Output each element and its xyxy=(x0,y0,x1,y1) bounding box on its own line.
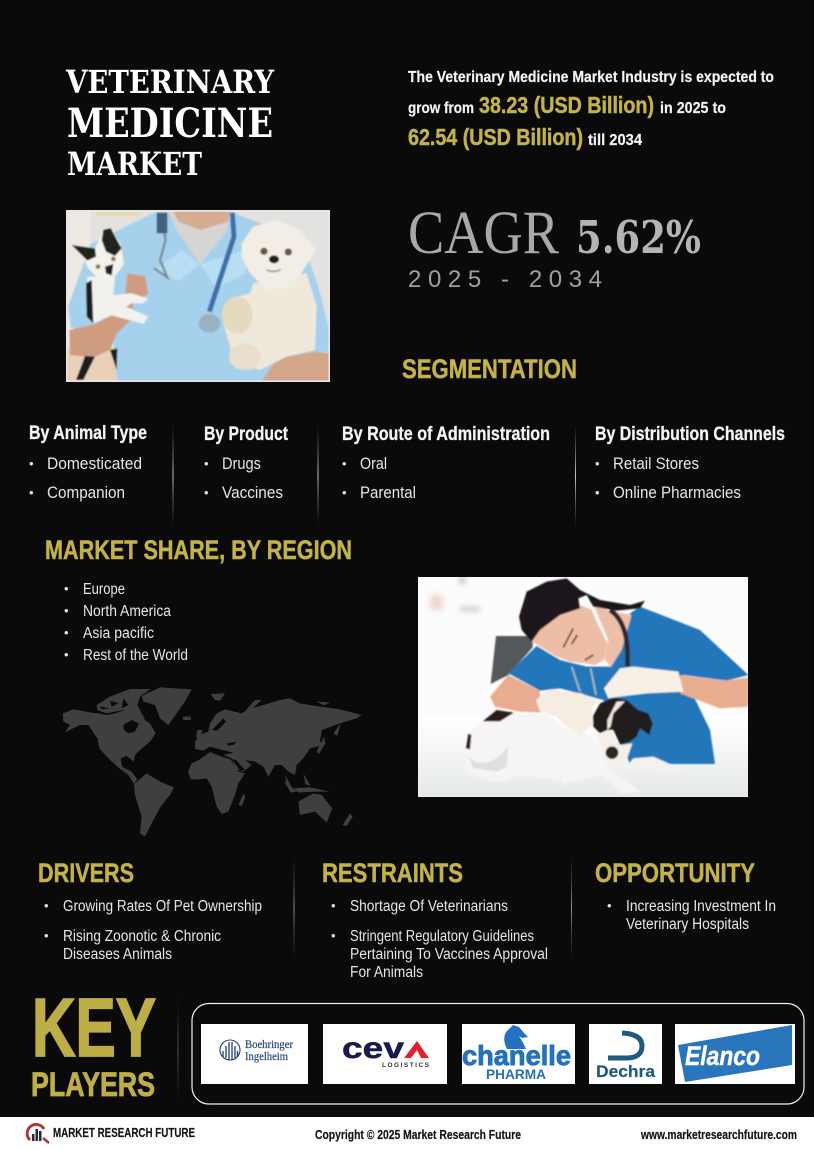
logo: Chanelle Pharma: PHARMA xyxy=(486,1066,546,1082)
CAGR: 5.62% xyxy=(576,211,701,264)
heading: key players: KEY xyxy=(32,981,156,1074)
panel: restraints: • xyxy=(331,928,336,943)
panel: restraints: • xyxy=(331,898,336,913)
segment: by product: Vaccines xyxy=(222,483,283,502)
stethoscope xyxy=(209,213,234,312)
table xyxy=(418,752,748,796)
market forecast text: The Veterinary Medicine Market Industry is expected to xyxy=(408,69,774,86)
photo: vet examining dog xyxy=(418,577,748,797)
region list: North America xyxy=(83,603,171,620)
dog xyxy=(223,273,317,370)
dog body xyxy=(466,713,640,793)
segment: by animal type: Domesticated xyxy=(47,454,142,473)
arms xyxy=(490,675,540,713)
segment: by product: By Product xyxy=(204,424,289,445)
region list: • xyxy=(64,625,69,640)
segment: by distribution channels xyxy=(595,424,785,502)
segment: by animal type: • xyxy=(29,485,34,500)
logo: Boehringer Ingelheim: Boehringer xyxy=(245,1039,293,1051)
stethoscope xyxy=(610,610,628,667)
segment: by distribution channels: • xyxy=(595,485,600,500)
cat body xyxy=(87,277,148,324)
segment: by animal type: By Animal Type xyxy=(29,423,147,444)
title: VETERINARY xyxy=(65,64,274,101)
panel: restraints: For Animals xyxy=(350,964,423,981)
logo: Elanco xyxy=(675,1024,795,1084)
face xyxy=(532,605,607,665)
backdrop details xyxy=(68,212,90,348)
panel: opportunity: • xyxy=(607,898,612,913)
photo: vet holding cat and dog xyxy=(66,210,330,382)
cat arm and hand xyxy=(69,273,148,357)
panel: restraints: Stringent Regulatory Guidelines xyxy=(350,928,534,945)
heading: key players: PLAYERS xyxy=(31,1066,155,1104)
logo: CEVA Logistics: cev xyxy=(342,1032,404,1065)
market forecast text: in 2025 to xyxy=(660,100,726,117)
segment: by distribution channels: Online Pharmacies xyxy=(613,483,741,502)
title: MEDICINE xyxy=(67,100,273,147)
CAGR: CAGR xyxy=(408,200,559,267)
panel: drivers xyxy=(38,858,262,963)
title: MARKET xyxy=(67,145,202,183)
segment: by product: • xyxy=(204,485,209,500)
heading: key players xyxy=(31,981,156,1104)
panel: restraints: Shortage Of Veterinarians xyxy=(350,898,508,915)
region list: Rest of the World xyxy=(83,647,188,664)
logo: CEVA Logistics: LOGISTICS xyxy=(382,1062,430,1069)
panel: restraints: Pertaining To Vaccines Approval xyxy=(350,946,548,963)
segment: by route of administration: • xyxy=(342,456,347,471)
gloves xyxy=(536,689,600,735)
logo: CEVA Logistics xyxy=(323,1024,447,1084)
segment: by product: • xyxy=(204,456,209,471)
panel: restraints: RESTRAINTS xyxy=(322,858,463,888)
segment: by animal type xyxy=(29,423,147,502)
map: americas and greenland xyxy=(63,687,192,837)
panel: opportunity: Increasing Investment In xyxy=(626,898,776,915)
heading: segmentation: SEGMENTATION xyxy=(402,354,577,384)
panel: opportunity xyxy=(595,858,776,933)
panel: opportunity: OPPORTUNITY xyxy=(595,858,755,888)
monitor xyxy=(491,636,533,684)
region list: • xyxy=(64,581,69,596)
logo: Boehringer Ingelheim: Ingelheim xyxy=(245,1051,288,1063)
panel: drivers: Diseases Animals xyxy=(63,946,172,963)
market forecast text xyxy=(408,69,774,150)
panel: opportunity: Veterinary Hospitals xyxy=(626,916,749,933)
hair xyxy=(519,578,645,642)
neck xyxy=(592,600,632,667)
dog head xyxy=(593,697,653,745)
blurred shelves xyxy=(430,595,443,610)
panel: drivers: Growing Rates Of Pet Ownership xyxy=(63,898,262,915)
scrubs xyxy=(68,213,329,381)
panel: drivers: • xyxy=(44,928,49,943)
title xyxy=(65,64,274,183)
segment: by distribution channels: • xyxy=(595,456,600,471)
logo: Chanelle Pharma: chanelle xyxy=(462,1040,571,1071)
market forecast text: till 2034 xyxy=(588,132,642,149)
cat head xyxy=(84,228,125,278)
logo: Elanco: Elanco xyxy=(685,1041,760,1071)
segment: by distribution channels: Retail Stores xyxy=(613,454,699,473)
segment: by route of administration xyxy=(342,424,550,502)
footer logo xyxy=(27,1124,195,1143)
dog arm xyxy=(262,352,329,381)
segment: by animal type: • xyxy=(29,456,34,471)
segment: by product: Drugs xyxy=(222,454,261,473)
world map xyxy=(63,687,362,837)
CAGR: 2025 - 2034 xyxy=(408,266,602,293)
footer logo: MARKET RESEARCH FUTURE xyxy=(53,1125,195,1140)
logo: Dechra: Dechra xyxy=(596,1062,656,1081)
heading: market share by region: MARKET SHARE, BY REGION xyxy=(45,535,352,565)
panel: drivers: Rising Zoonotic & Chronic xyxy=(63,928,221,945)
market forecast text: 38.23 (USD Billion) xyxy=(479,92,654,118)
panel: drivers: • xyxy=(44,898,49,913)
eyes and lips xyxy=(563,628,593,660)
shirt and neck xyxy=(168,212,232,264)
segment: by animal type: Companion xyxy=(47,483,125,502)
market forecast text: grow from xyxy=(408,100,474,117)
footer xyxy=(0,1117,814,1150)
logo: Chanelle Pharma xyxy=(462,1024,575,1084)
region list: • xyxy=(64,647,69,662)
region list xyxy=(64,581,188,664)
CAGR xyxy=(408,200,701,293)
region list: Asia pacific xyxy=(83,625,154,642)
logo: Dechra xyxy=(589,1024,662,1084)
segment: by route of administration: By Route of Administration xyxy=(342,424,550,445)
region list: • xyxy=(64,603,69,618)
footer: Copyright © 2025 Market Research Future xyxy=(315,1127,521,1142)
scrubs xyxy=(508,607,748,764)
key players frame xyxy=(192,1004,804,1104)
segment: by route of administration: • xyxy=(342,485,347,500)
logo: Boehringer Ingelheim xyxy=(201,1024,308,1084)
segment: by product xyxy=(204,424,289,502)
panel: drivers: DRIVERS xyxy=(38,858,134,888)
segment: by route of administration: Parental xyxy=(360,483,416,502)
market forecast text: 62.54 (USD Billion) xyxy=(408,124,583,150)
segment: by route of administration: Oral xyxy=(360,454,387,473)
map: europe, africa, asia and oceania xyxy=(188,693,362,826)
region list: Europe xyxy=(83,581,125,598)
panel: restraints xyxy=(322,858,548,981)
